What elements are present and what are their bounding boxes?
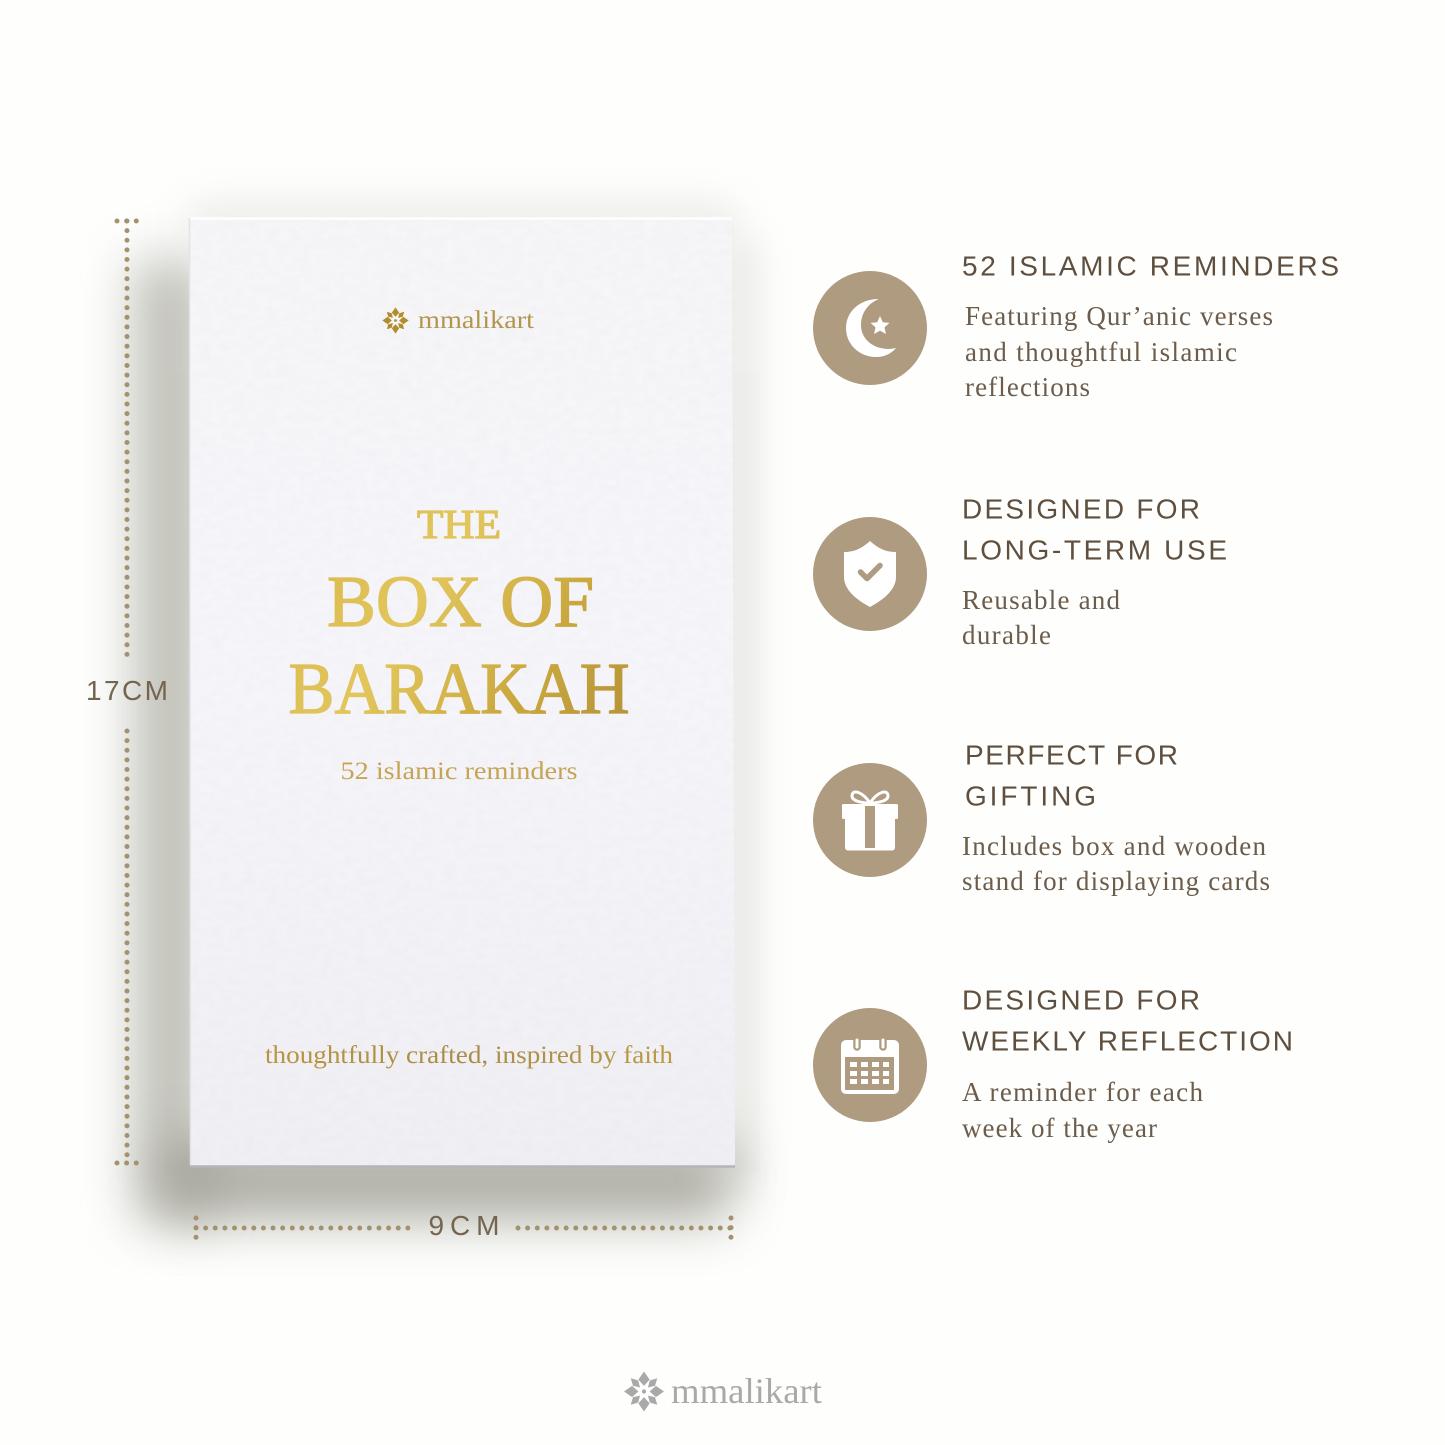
box logo: mmalikart: [418, 307, 534, 334]
icon: calendar: [813, 1008, 927, 1122]
description: A reminder for each: [962, 1077, 1204, 1107]
box subtitle: 52 islamic reminders: [340, 758, 578, 785]
description: [962, 1077, 1204, 1143]
description: Featuring Qur’anic verses: [965, 301, 1273, 331]
description: [965, 301, 1273, 402]
box tagline: thoughtfully crafted, inspired by faith: [265, 1040, 673, 1069]
feature: long-term use: [813, 494, 1227, 650]
description: week of the year: [962, 1113, 1157, 1143]
description: [962, 831, 1270, 896]
heading: LONG-TERM USE: [962, 534, 1227, 566]
description: durable: [962, 620, 1051, 650]
heading: WEEKLY REFLECTION: [962, 1026, 1293, 1056]
box face: [189, 217, 735, 1167]
heading: GIFTING: [965, 780, 1096, 812]
icon: crescent and star: [813, 271, 927, 385]
feature: gifting: [813, 740, 1270, 896]
heading: PERFECT FOR: [965, 740, 1178, 770]
box shadow: [135, 205, 760, 1220]
icon: shield with check: [813, 517, 927, 631]
dimension: width: [196, 1210, 731, 1241]
box logo: [382, 307, 534, 334]
heading: [962, 984, 1293, 1056]
feature: weekly reflection: [813, 984, 1293, 1143]
dimension: height: [86, 221, 168, 1163]
heading: [965, 740, 1178, 812]
heading: DESIGNED FOR: [962, 494, 1200, 524]
dimension: width: 9CM: [428, 1210, 500, 1241]
description: [962, 585, 1120, 650]
heading: DESIGNED FOR: [962, 984, 1200, 1016]
heading: [962, 494, 1227, 566]
footer logo: mmalikart: [671, 1371, 822, 1411]
description: Includes box and wooden: [962, 831, 1266, 861]
box title: [288, 501, 630, 729]
description: Reusable and: [962, 585, 1120, 615]
box title: BOX OF: [327, 561, 594, 642]
description: reflections: [965, 372, 1090, 402]
heading: 52 ISLAMIC REMINDERS: [962, 250, 1339, 282]
product box: [189, 217, 735, 1167]
icon: gift: [813, 763, 927, 877]
dimension: height: 17CM: [86, 675, 168, 706]
box title: BARAKAH: [288, 648, 630, 729]
feature: reminders: [813, 250, 1339, 402]
description: stand for displaying cards: [962, 866, 1270, 896]
box title: THE: [417, 501, 501, 547]
description: and thoughtful islamic: [965, 337, 1237, 367]
